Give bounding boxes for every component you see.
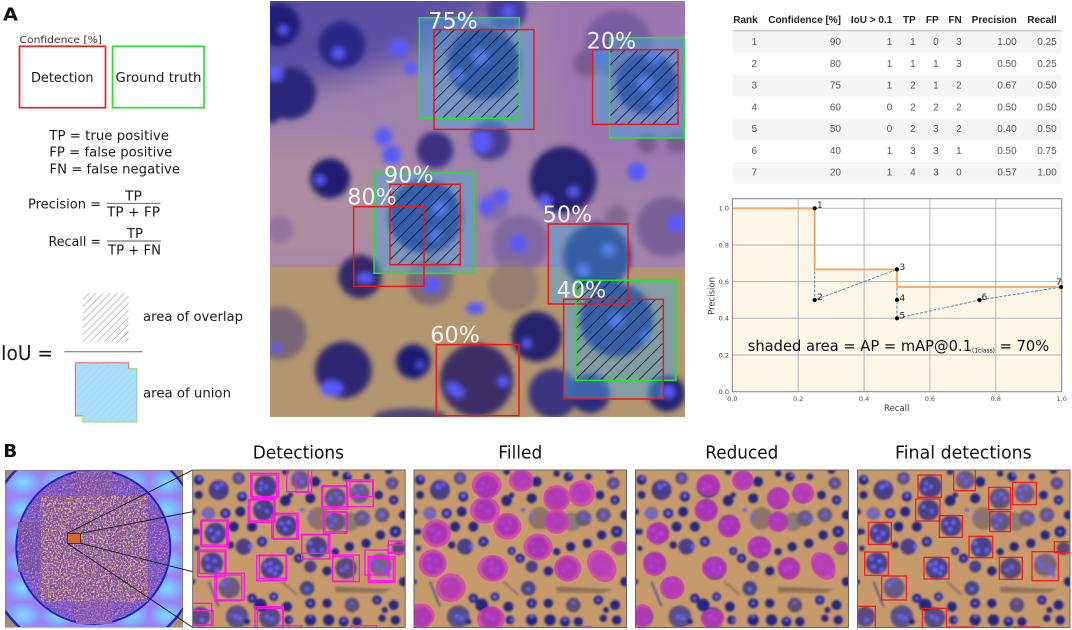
table rows: 2 <box>751 59 757 70</box>
axis ticks: 0.4 <box>719 315 729 323</box>
axis ticks: 1.0 <box>1057 395 1067 403</box>
precision formula: TP + FP <box>106 206 160 221</box>
interpolated orange step line <box>732 208 1062 287</box>
dashed precision-recall line <box>815 208 1062 318</box>
point labels: 7 <box>1056 278 1062 288</box>
soft background tones <box>270 1 685 262</box>
point labels: 5 <box>900 312 905 322</box>
table rows: 90 <box>830 37 841 48</box>
table rows: 1 <box>887 168 893 179</box>
table rows: 60 <box>830 102 841 113</box>
chart annotation: = 70% <box>995 337 1049 355</box>
table rows: 1 <box>910 37 916 48</box>
table rows: 1.00 <box>997 37 1017 48</box>
panel: final detections image <box>853 466 1072 630</box>
table header: Confidence [%] <box>768 15 841 26</box>
table rows: 1 <box>887 59 893 70</box>
table rows: 0.67 <box>997 81 1017 92</box>
detection box <box>20 46 106 108</box>
table rows: 2 <box>910 81 916 92</box>
axis ticks: 0.8 <box>991 395 1001 403</box>
table rows: 0.50 <box>997 59 1017 70</box>
axis ticks: 0.2 <box>793 395 803 403</box>
table rows: 3 <box>933 146 939 157</box>
precision formula: Precision = <box>28 197 101 212</box>
axis titles <box>708 277 909 414</box>
panel: filled image <box>407 466 630 630</box>
table rows: 3 <box>956 59 962 70</box>
table rows: 2 <box>933 102 939 113</box>
panel label A: A <box>3 4 18 26</box>
table rows: 1 <box>933 81 939 92</box>
table rows: 50 <box>830 124 841 135</box>
table rows: 0 <box>887 102 893 113</box>
heading: Final detections: Final detections <box>895 443 1032 463</box>
detection box: Detection <box>31 71 94 86</box>
abbreviations: TP = true positive <box>48 129 169 144</box>
recall formula <box>48 227 161 258</box>
table rows: 0.50 <box>1037 124 1057 135</box>
IoU formula: IoU = <box>1 341 53 365</box>
filled pink masks <box>407 470 629 630</box>
panel: legend and formulas <box>1 35 243 422</box>
confidence label: Confidence [%] <box>20 35 102 46</box>
table rows: 1 <box>887 146 893 157</box>
recall formula: TP <box>126 227 143 242</box>
ground truth box <box>112 46 204 108</box>
table header: IoU > 0.1 <box>851 15 893 26</box>
table rows: 0.75 <box>1037 146 1057 157</box>
confidence labels: 50% <box>543 203 592 228</box>
confidence labels: 20% <box>587 29 636 54</box>
table rows: 2 <box>956 81 962 92</box>
axis ticks <box>719 205 1067 403</box>
precision formula <box>28 190 160 221</box>
heading: Filled: Filled <box>498 443 542 463</box>
axis ticks: 0.4 <box>859 395 869 403</box>
blue overlay of box unions <box>374 18 684 399</box>
table header <box>733 15 1057 26</box>
shaded area under curve <box>732 208 1062 392</box>
table rows: 0.50 <box>997 102 1017 113</box>
chart: precision-recall curve <box>708 199 1067 414</box>
table rows: 1 <box>933 59 939 70</box>
speckled texture <box>17 471 169 623</box>
point labels: 2 <box>817 293 823 303</box>
table header: FP <box>926 15 939 26</box>
table rows: 75 <box>830 81 841 92</box>
confidence labels: 60% <box>430 323 480 348</box>
magenta detection boxes <box>190 467 408 630</box>
recall formula: Recall = <box>48 235 101 250</box>
table rows: 0.25 <box>1037 59 1057 70</box>
abbreviations: FP = false positive <box>49 146 172 161</box>
axis ticks: 0.0 <box>727 395 737 403</box>
bounding boxes <box>354 18 684 416</box>
axis ticks: 0.2 <box>719 351 729 359</box>
panel: reduced image <box>632 466 851 628</box>
table rows: 2 <box>956 102 962 113</box>
table rows: 5 <box>751 124 757 135</box>
confidence labels: 75% <box>428 9 478 34</box>
table rows: 0.40 <box>997 124 1017 135</box>
axis ticks: 1.0 <box>719 205 729 213</box>
table rows: 3 <box>751 81 757 92</box>
axis ticks: 0.6 <box>719 278 729 286</box>
IoU formula: area of overlap <box>143 310 243 325</box>
table rows: 3 <box>933 124 939 135</box>
point labels: 1 <box>817 201 823 211</box>
red final boxes <box>853 467 1072 630</box>
panel: microscopy detections example <box>270 1 685 417</box>
table rows: 2 <box>956 124 962 135</box>
axis titles: Precision <box>708 277 718 315</box>
table header: Rank <box>733 15 758 26</box>
axis ticks: 0.6 <box>925 395 935 403</box>
microscopy cells <box>253 0 697 425</box>
table header: TP <box>903 15 916 26</box>
confidence labels <box>347 9 636 348</box>
table rows: 1 <box>887 37 893 48</box>
heading: Reduced: Reduced <box>705 443 778 463</box>
table rows <box>751 37 1057 179</box>
abbreviations <box>48 129 180 177</box>
chart annotation: (1class) <box>972 348 995 354</box>
table rows: 0.50 <box>997 146 1017 157</box>
precision formula: TP <box>124 190 142 205</box>
table rows: 1 <box>751 37 757 48</box>
data points <box>813 206 1063 320</box>
panel: whole-well overview <box>5 470 183 628</box>
table header: FN <box>948 15 962 26</box>
table rows: 1 <box>910 59 916 70</box>
axis ticks: 0.8 <box>719 241 729 249</box>
IoU formula <box>1 293 243 422</box>
heading: Detections: Detections <box>253 443 344 463</box>
point labels: 6 <box>982 293 988 303</box>
point labels: 3 <box>900 263 905 273</box>
panel: detections image <box>189 466 408 630</box>
reduced pink masks <box>632 471 848 628</box>
table: ranked detections <box>733 15 1062 184</box>
confidence labels: 80% <box>347 185 397 210</box>
axis ticks: 0.0 <box>719 388 729 396</box>
table rows: 0.50 <box>1037 102 1057 113</box>
table rows: 3 <box>910 146 916 157</box>
zoomed region marker <box>68 534 80 544</box>
confidence labels: 90% <box>384 164 434 189</box>
table rows: 3 <box>933 168 939 179</box>
point labels: 4 <box>900 294 906 304</box>
table rows: 20 <box>830 168 841 179</box>
table rows: 2 <box>910 124 916 135</box>
table rows: 0.50 <box>1037 81 1057 92</box>
table rows: 0.25 <box>1037 37 1057 48</box>
ground truth box: Ground truth <box>116 71 202 86</box>
table rows: 0 <box>887 124 893 135</box>
table rows: 40 <box>830 146 841 157</box>
table rows: 6 <box>751 146 757 157</box>
hatched overlap areas <box>390 30 678 380</box>
table rows: 0 <box>933 37 939 48</box>
recall formula: TP + FN <box>107 243 161 258</box>
table rows: 1 <box>887 81 893 92</box>
panel label B: B <box>3 441 17 462</box>
table rows: 1 <box>956 146 962 157</box>
table rows: 80 <box>830 59 841 70</box>
table rows: 3 <box>956 37 962 48</box>
chart annotation: shaded area = AP = mAP@0.1 <box>748 337 977 355</box>
zoom lines to detections panel <box>67 470 193 628</box>
abbreviations: FN = false negative <box>50 162 180 177</box>
axis titles: Recall <box>884 404 909 414</box>
table rows: 1.00 <box>1037 168 1057 179</box>
IoU formula: area of union <box>143 386 231 401</box>
table rows: 2 <box>910 102 916 113</box>
table rows: 4 <box>751 102 757 113</box>
table header: Recall <box>1027 15 1057 26</box>
table header: Precision <box>972 15 1017 26</box>
point labels <box>817 201 1062 322</box>
table rows: 0 <box>956 168 962 179</box>
table rows: 0.57 <box>997 168 1017 179</box>
confidence labels: 40% <box>557 278 606 303</box>
table rows: 7 <box>751 168 757 179</box>
table rows: 4 <box>910 168 916 179</box>
